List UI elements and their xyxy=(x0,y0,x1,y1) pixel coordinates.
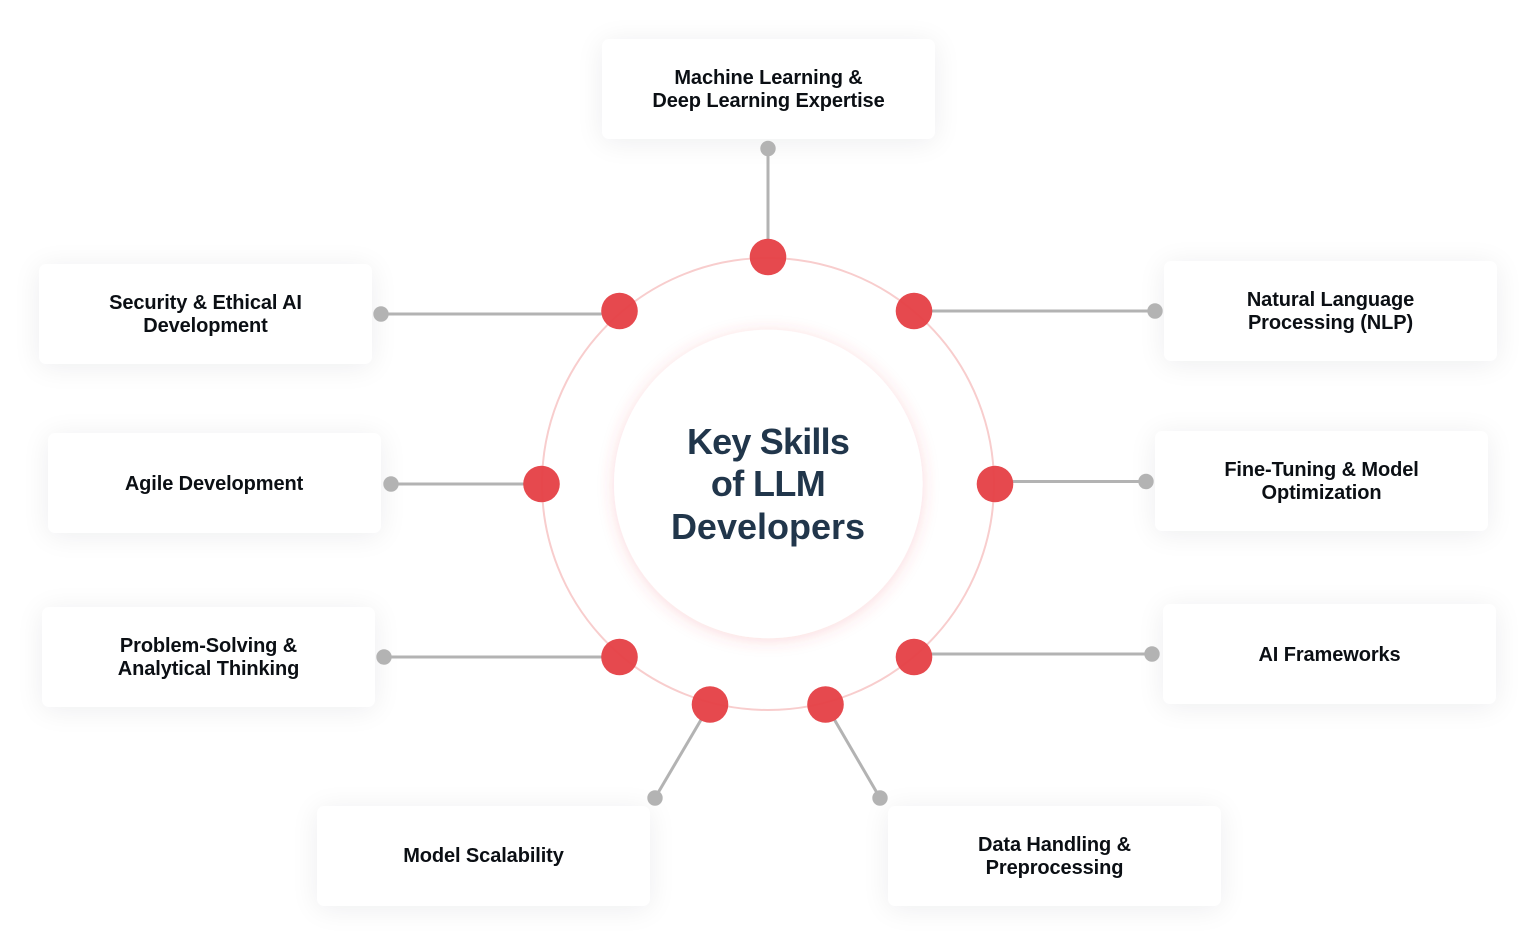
connector: bottom right xyxy=(835,720,888,806)
card: AI frameworks xyxy=(1163,604,1496,704)
card: problem-solving: Problem-Solving & xyxy=(120,635,297,657)
card: AI frameworks: AI Frameworks xyxy=(1258,644,1401,666)
card: data handling: Preprocessing xyxy=(986,857,1123,879)
card: machine learning: Deep Learning Expertise xyxy=(652,90,885,112)
card: agile: Agile Development xyxy=(125,473,303,495)
center title: Developers xyxy=(671,506,865,546)
card: NLP xyxy=(1164,261,1497,360)
card: machine learning xyxy=(602,39,935,138)
center title: of LLM xyxy=(711,463,825,504)
card: problem-solving: Analytical Thinking xyxy=(118,658,299,680)
card: data handling: Data Handling & xyxy=(978,834,1131,856)
card: data handling xyxy=(888,806,1221,906)
card: fine-tuning: Fine-Tuning & Model xyxy=(1224,459,1419,481)
red nodes xyxy=(523,239,1013,723)
center circle xyxy=(614,330,923,638)
card: fine-tuning: Optimization xyxy=(1262,482,1381,504)
connector: upper right xyxy=(932,303,1163,319)
connector: lower left xyxy=(376,649,602,665)
card: model scalability: Model Scalability xyxy=(403,845,564,867)
card: security xyxy=(39,264,372,364)
connector: lower right xyxy=(932,646,1160,662)
center title xyxy=(671,420,865,546)
card: NLP: Processing (NLP) xyxy=(1248,312,1413,334)
card: security: Security & Ethical AI xyxy=(109,292,302,314)
card: problem-solving xyxy=(42,607,375,706)
card: NLP: Natural Language xyxy=(1247,289,1414,311)
outer ring xyxy=(542,258,994,710)
connector: upper left xyxy=(373,306,602,322)
connector: left xyxy=(383,476,524,492)
card: model scalability xyxy=(317,806,650,906)
center title: Key Skills xyxy=(687,420,849,462)
connector: top xyxy=(760,141,776,239)
card: security: Development xyxy=(143,315,268,337)
connector: right xyxy=(1013,474,1154,489)
card: agile xyxy=(48,433,380,532)
card: fine-tuning xyxy=(1155,431,1488,530)
connector: bottom left xyxy=(647,720,701,806)
card: machine learning: Machine Learning & xyxy=(674,67,863,89)
